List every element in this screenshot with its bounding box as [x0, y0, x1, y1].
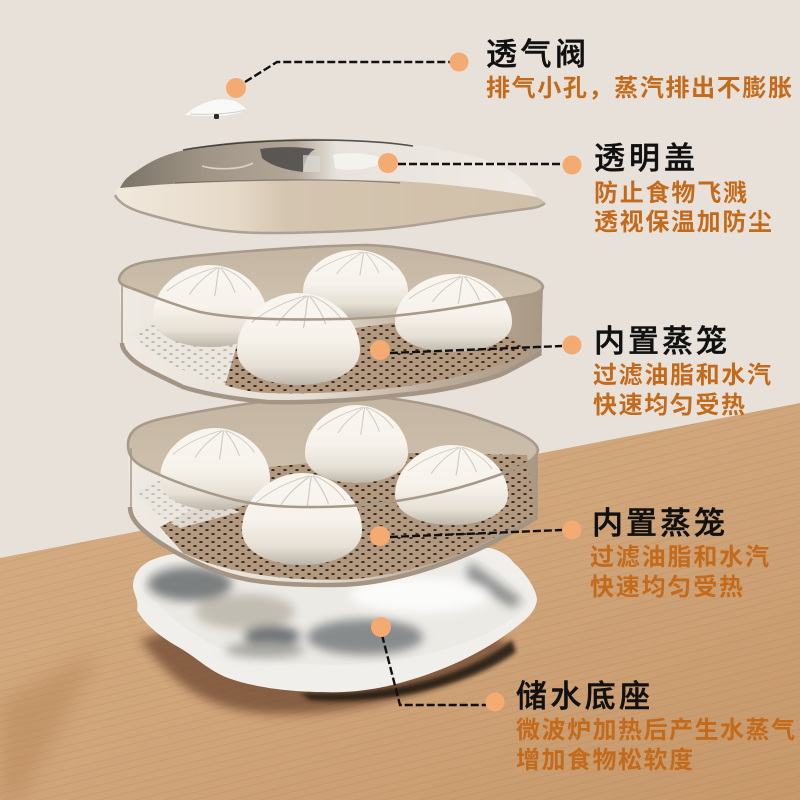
description: 排气小孔，蒸汽排出不膨胀 — [486, 75, 792, 102]
buns — [153, 250, 512, 385]
tier bottom rim — [122, 343, 541, 402]
description line 2: 增加食物松软度 — [516, 746, 693, 774]
bun right — [395, 274, 512, 352]
pale plate edge — [133, 322, 240, 385]
steam valve cap — [185, 99, 246, 119]
lid rim — [115, 195, 545, 233]
anchor dot — [371, 617, 391, 637]
bun front — [237, 293, 360, 385]
tier bottom rim — [130, 507, 537, 585]
dark contact shadow — [300, 640, 516, 701]
callout: base — [371, 617, 795, 774]
end dot — [486, 692, 504, 712]
callout: lower steamer — [370, 506, 769, 601]
heading: 储水底座 — [516, 679, 650, 714]
bun right — [395, 445, 508, 525]
callout: lid — [378, 141, 772, 236]
lower steamer tier — [128, 395, 538, 585]
description line 2: 快速均匀受热 — [590, 574, 743, 601]
transparent lid — [115, 138, 545, 233]
water storage base — [133, 548, 537, 692]
leader line — [245, 62, 450, 82]
leader line — [382, 635, 486, 705]
leader line — [390, 346, 562, 353]
water shading — [148, 562, 522, 658]
tier body — [128, 395, 538, 585]
buns — [160, 405, 508, 565]
wooden table — [0, 403, 800, 800]
base shell — [133, 548, 537, 692]
leader line — [390, 530, 562, 537]
back wall — [128, 395, 538, 507]
bun back middle — [305, 405, 408, 483]
anchor dot — [370, 340, 390, 360]
anchor dot — [378, 153, 398, 173]
tier rim — [128, 395, 538, 507]
bun back middle — [303, 250, 408, 317]
anchor dot — [370, 526, 390, 546]
lid top edge highlight — [183, 140, 413, 150]
callout: valve — [226, 37, 792, 102]
description: 防止食物飞溅 — [594, 179, 747, 207]
bun front — [242, 473, 362, 565]
anchor dot — [226, 78, 246, 98]
end dot — [562, 336, 582, 354]
pale plate edge — [136, 480, 240, 528]
lid underside — [115, 180, 545, 233]
lid dome — [120, 138, 537, 197]
end dot — [562, 520, 582, 540]
description: 过滤油脂和水汽 — [593, 362, 771, 389]
bun back left — [160, 428, 270, 510]
callout: upper steamer — [370, 324, 771, 419]
end dot — [562, 156, 582, 174]
perforated plate — [225, 323, 530, 393]
heading: 内置蒸笼 — [594, 324, 727, 359]
description: 过滤油脂和水汽 — [590, 544, 769, 571]
heading: 透气阀 — [486, 37, 586, 72]
back wall — [119, 245, 543, 319]
heading: 透明盖 — [594, 141, 695, 176]
description: 微波炉加热后产生水蒸气 — [516, 717, 795, 744]
table shadow under base — [140, 620, 510, 714]
description line 2: 快速均匀受热 — [593, 392, 745, 419]
perforated plate — [160, 453, 535, 580]
bun back left — [153, 265, 267, 347]
base water — [143, 557, 528, 665]
end dot — [450, 52, 468, 72]
description line 2: 透视保温加防尘 — [594, 209, 772, 236]
tier body — [119, 245, 543, 402]
upper steamer tier — [119, 245, 543, 402]
tier rim — [119, 245, 543, 319]
heading: 内置蒸笼 — [592, 506, 725, 541]
leader line — [398, 163, 562, 165]
lid inner detail — [260, 147, 315, 172]
